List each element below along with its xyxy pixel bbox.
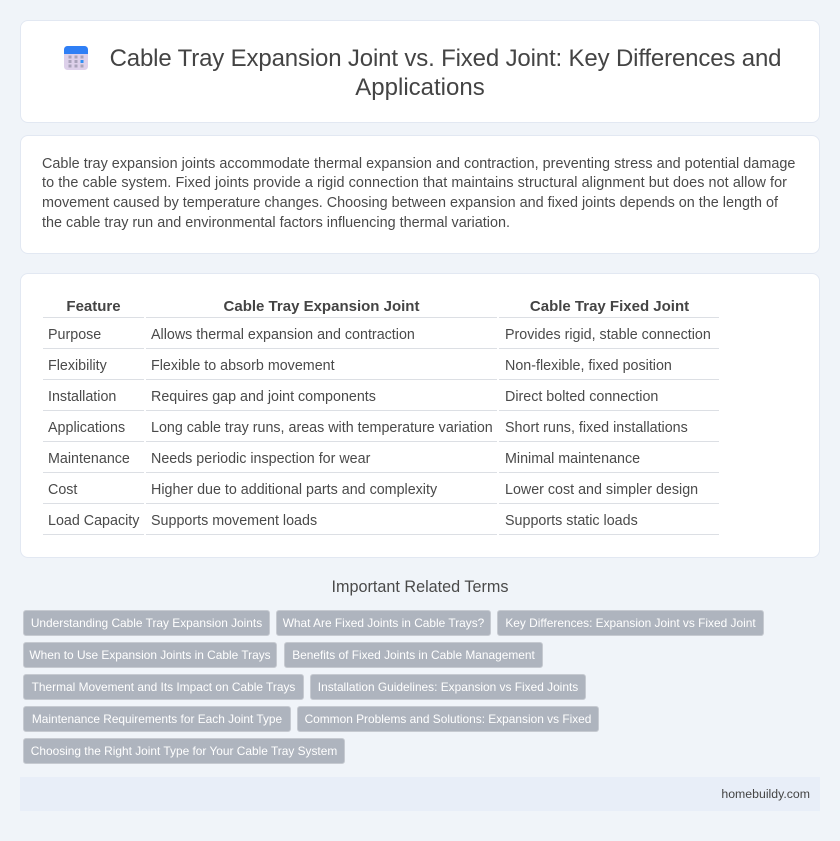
comparison table: Supports static loads — [505, 513, 638, 529]
comparison table: Requires gap and joint components — [151, 389, 376, 405]
intro text — [42, 156, 795, 231]
comparison table: Needs periodic inspection for wear — [151, 451, 370, 467]
intro text: the cable tray run and environmental factors influencing thermal variation. — [42, 215, 510, 231]
comparison table: Allows thermal expansion and contraction — [151, 327, 415, 343]
footer source text: homebuildy.com — [721, 787, 810, 801]
related term tags: Installation Guidelines: Expansion vs Fixed Joints — [318, 680, 578, 694]
related term tags: Maintenance Requirements for Each Joint Type — [32, 712, 282, 726]
related term tags: Understanding Cable Tray Expansion Joints — [31, 616, 262, 630]
comparison table: Flexibility — [48, 358, 107, 374]
related term tags — [23, 610, 764, 764]
related terms heading: Important Related Terms — [332, 578, 508, 596]
comparison table: Supports movement loads — [151, 513, 317, 529]
header panel — [20, 20, 820, 123]
comparison table: Cable Tray Fixed Joint — [530, 298, 689, 315]
footer bar — [20, 777, 820, 811]
comparison table: Minimal maintenance — [505, 451, 640, 467]
comparison table: Non-flexible, fixed position — [505, 358, 672, 374]
title: Cable Tray Expansion Joint vs. Fixed Joint: Key Differences and — [110, 45, 781, 72]
related term tags: Key Differences: Expansion Joint vs Fixed Joint — [505, 616, 756, 630]
related term tags: Thermal Movement and Its Impact on Cable Trays — [32, 680, 295, 694]
icon: calendar — [64, 46, 88, 70]
comparison table: Higher due to additional parts and complexity — [151, 482, 437, 498]
comparison table: Maintenance — [48, 451, 130, 467]
comparison table: Feature — [66, 298, 121, 315]
intro text: Cable tray expansion joints accommodate thermal expansion and contraction, preventing stress and potential damage — [42, 156, 795, 172]
comparison table: Installation — [48, 389, 116, 405]
comparison table: Flexible to absorb movement — [151, 358, 335, 374]
comparison table: Short runs, fixed installations — [505, 420, 688, 436]
intro text: to the cable system. Fixed joints provide a rigid connection that maintains structural alignment but does not allow for — [42, 175, 787, 191]
comparison table: Cable Tray Expansion Joint — [224, 298, 419, 315]
comparison table: Lower cost and simpler design — [505, 482, 698, 498]
comparison table: Long cable tray runs, areas with temperature variation — [151, 420, 493, 436]
comparison table — [43, 298, 719, 535]
related term tags: When to Use Expansion Joints in Cable Trays — [29, 648, 271, 662]
related term tags: Common Problems and Solutions: Expansion vs Fixed — [305, 712, 591, 726]
related term tags: Benefits of Fixed Joints in Cable Management — [292, 648, 535, 662]
title: Applications — [355, 74, 485, 100]
comparison table: Provides rigid, stable connection — [505, 327, 711, 343]
comparison table: Purpose — [48, 327, 101, 343]
comparison table: Cost — [48, 482, 77, 498]
comparison table: Load Capacity — [48, 513, 139, 529]
comparison table: Direct bolted connection — [505, 389, 658, 405]
intro panel — [20, 135, 820, 254]
title — [110, 45, 781, 100]
related term tags: Choosing the Right Joint Type for Your Cable Tray System — [31, 744, 337, 758]
comparison table: Applications — [48, 420, 125, 436]
intro text: movement caused by temperature changes. Choosing between expansion and fixed joints depends on the length of — [42, 195, 778, 211]
related term tags: What Are Fixed Joints in Cable Trays? — [283, 616, 484, 630]
table panel — [20, 273, 820, 558]
